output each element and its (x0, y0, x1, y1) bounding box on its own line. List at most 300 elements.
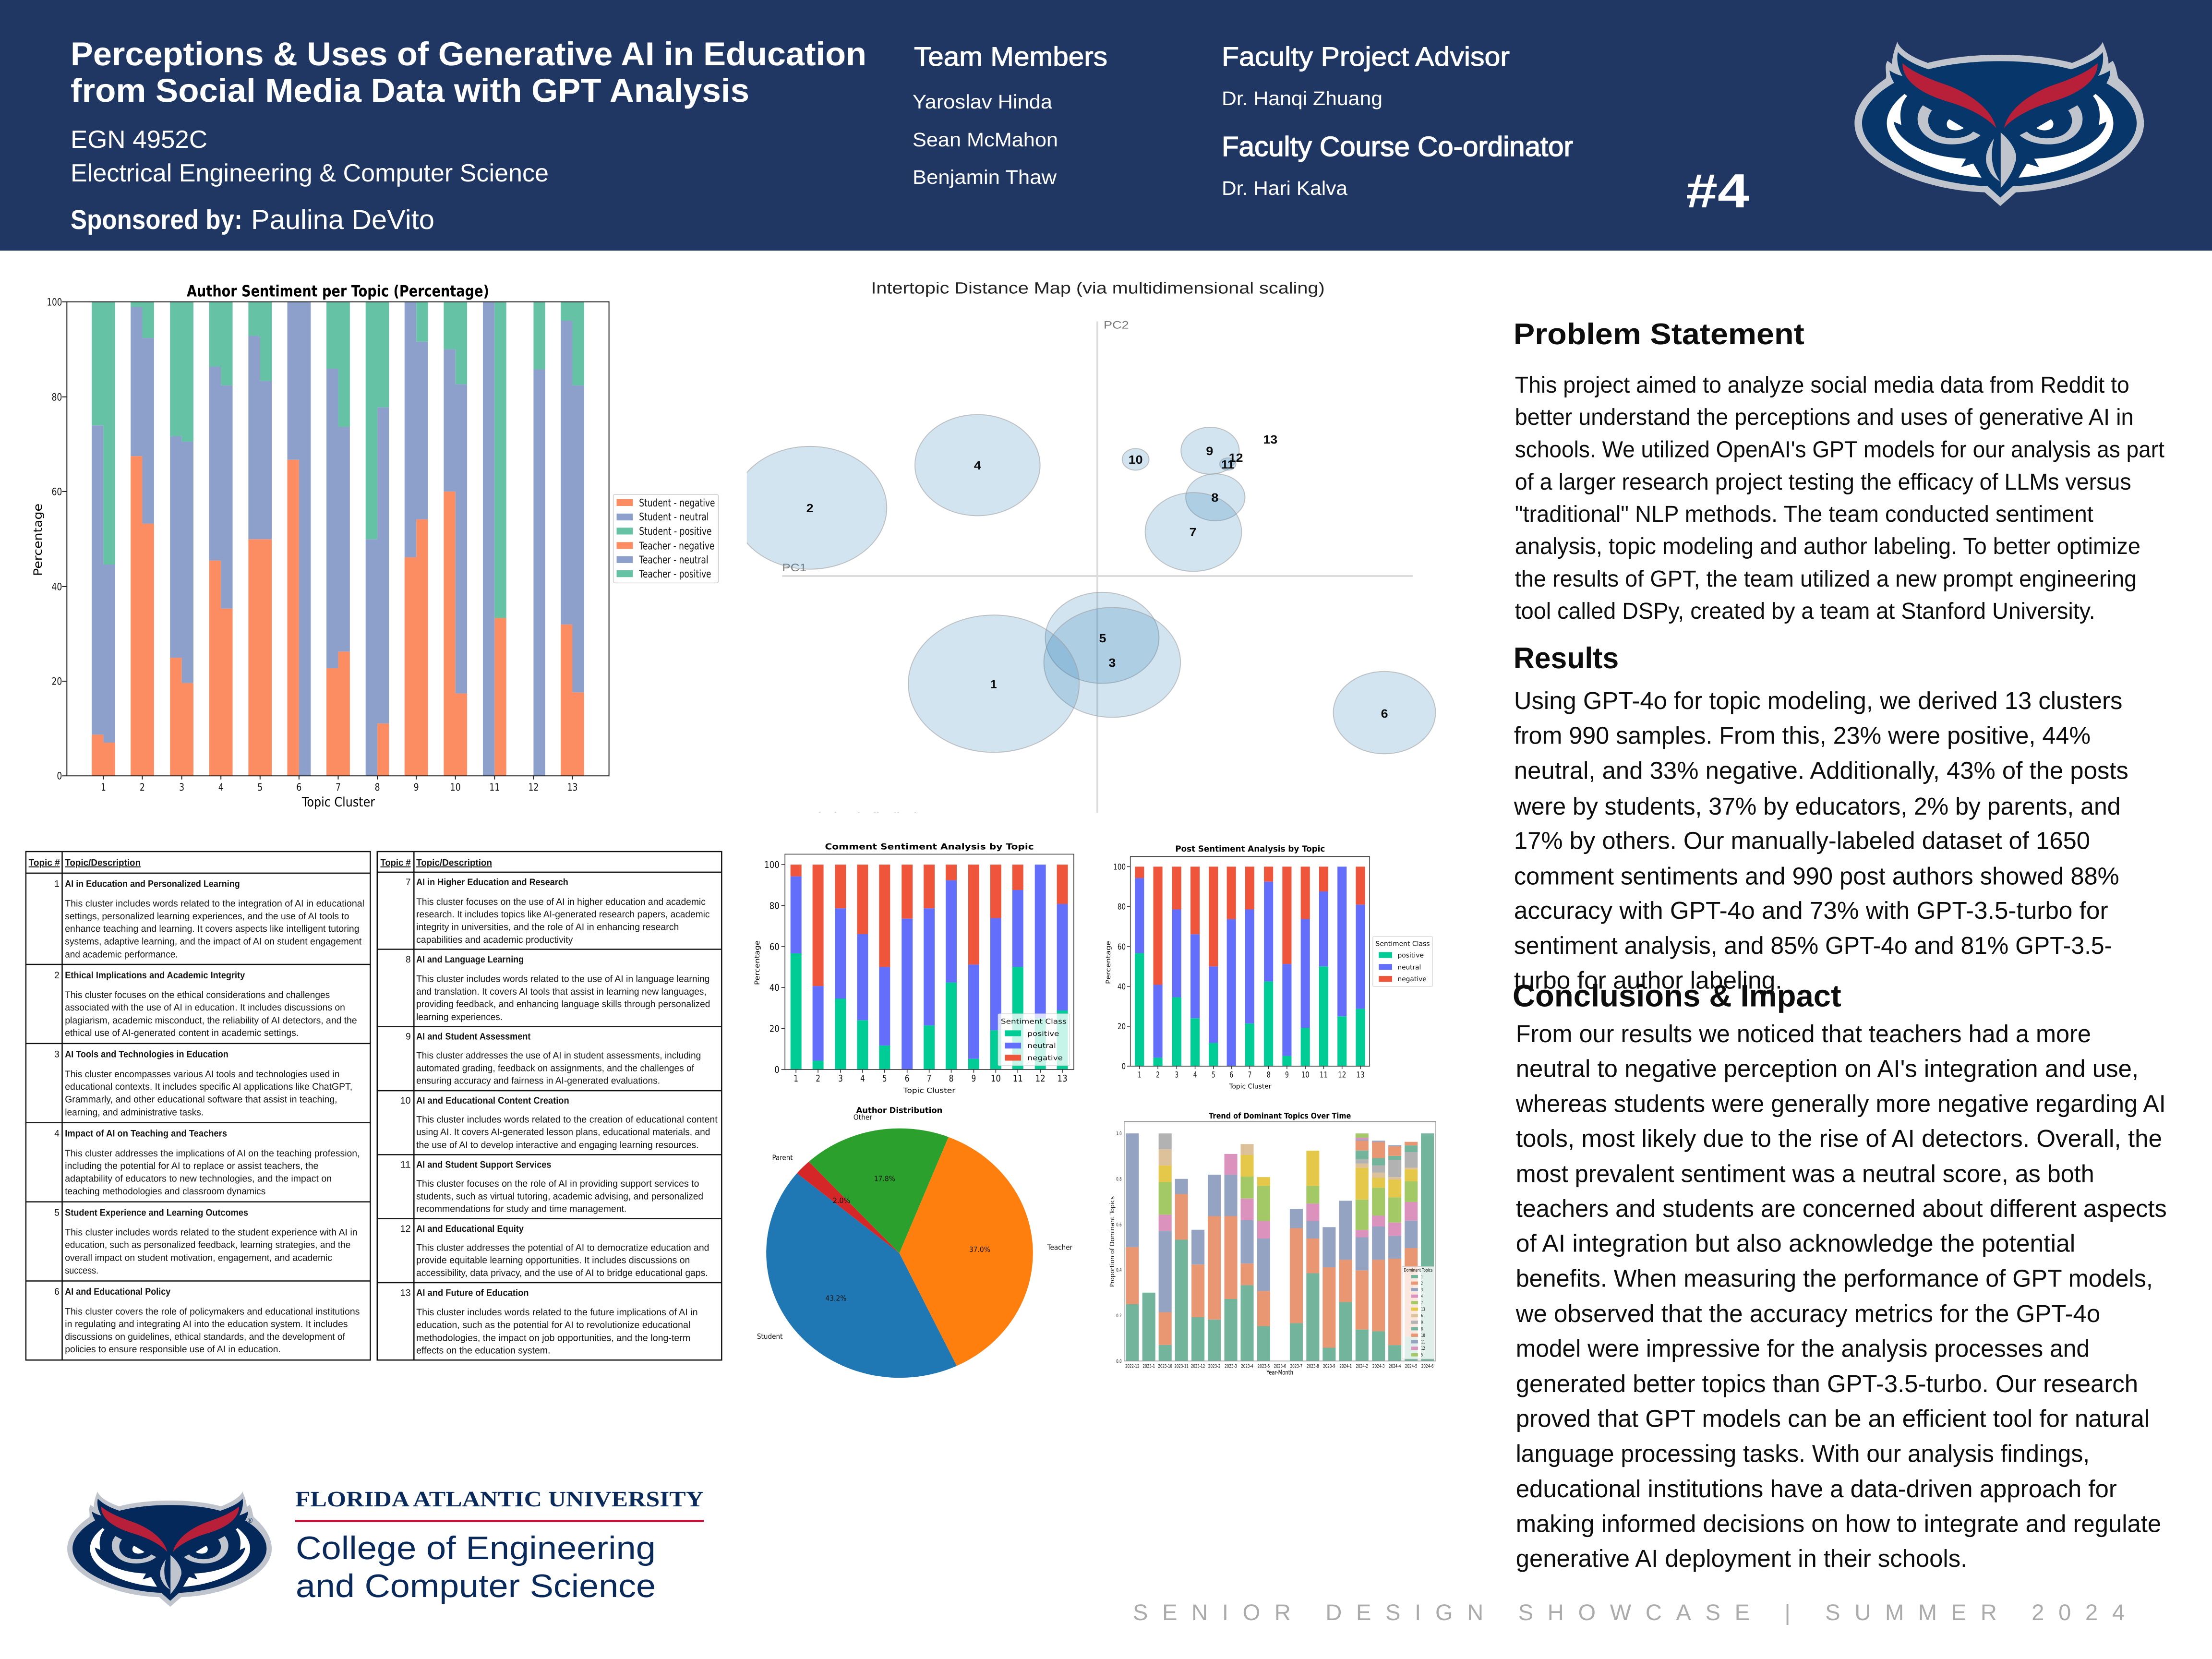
heading: problem statement: Problem Statement (1514, 317, 1804, 350)
text: results body: comment sentiments and 990 post authors showed 88% (1514, 863, 2119, 890)
university name: FLORIDA ATLANTIC UNIVERSITY (295, 1487, 704, 1511)
topic 3 (54, 1049, 352, 1118)
text: problem statement body: "traditional" NLP methods. The team conducted sentiment (1515, 501, 2093, 527)
bubble labels: 12 (1229, 451, 1243, 464)
topic 1: 1 (54, 878, 60, 889)
team members (913, 41, 1107, 188)
topic 12: provide equitable learning opportunities. It includes discussions on (416, 1255, 690, 1265)
faculty (1222, 41, 1573, 199)
legend: 4 (1421, 1294, 1423, 1299)
topic 2 (54, 970, 357, 1038)
axes and cut-off caption (782, 321, 1413, 822)
x axis tick labels: 3 (838, 1073, 843, 1084)
topic 5: education, such as personalized feedback, learning strategies, and the (65, 1239, 350, 1250)
text: conclusions body: generated better topics than GPT-3.5-turbo. Our research (1516, 1370, 2138, 1398)
topic 4: adaptability of educators to new technologies, and the impact on (65, 1173, 332, 1184)
x axis tick labels: 2023-6 (1274, 1363, 1286, 1369)
bubble labels: 11 (1221, 457, 1234, 471)
topic 6: policies to ensure responsible use of AI in education. (65, 1344, 281, 1354)
topic 10 (400, 1095, 718, 1150)
topic 13: methodologies, the impact on job opportunities, and the long-term (416, 1333, 690, 1343)
icon: owl logo (1854, 42, 2144, 206)
topic 9: This cluster addresses the use of AI in student assessments, including (416, 1050, 701, 1060)
x axis tick labels: 1 (1138, 1070, 1142, 1080)
legend: 9 (1421, 1320, 1423, 1325)
axes (781, 854, 1074, 1073)
legend: 11 (1421, 1339, 1425, 1345)
course information: EGN 4952C (71, 126, 207, 154)
topic 9 (406, 1031, 701, 1086)
topic 8: and translation. It covers AI tools that assist in learning new languages, (416, 986, 707, 997)
stacked bars: topics 4 and 12 (1159, 1138, 1418, 1238)
topic 3: AI Tools and Technologies in Education (65, 1049, 228, 1059)
topic 5: overall impact on student motivation, engagement, and academic (65, 1252, 332, 1263)
topic bubbles (733, 415, 1436, 754)
text: conclusions body (1515, 1020, 2167, 1573)
college name (296, 1530, 656, 1604)
team members: Benjamin Thaw (913, 166, 1057, 188)
bars: positive (92, 302, 584, 618)
topic 6: 6 (54, 1286, 60, 1297)
axes (62, 302, 609, 780)
chart: post sentiment analysis by topic: Topic Cluster (1229, 1082, 1271, 1090)
text: conclusions body: proved that GPT models can be an efficient tool for natural (1516, 1405, 2150, 1432)
axis labels: PC1 (782, 562, 806, 574)
topic 1: and academic performance. (65, 949, 178, 960)
chart: post sentiment analysis by topic: 20 (1118, 1022, 1126, 1031)
x axis tick labels: 7 (927, 1073, 931, 1084)
topic 4 (54, 1128, 360, 1196)
x axis tick labels: 1 (101, 781, 106, 793)
chart: comment sentiment analysis by topic: 0 (774, 1064, 780, 1075)
topic 3: educational contexts. It includes specific AI applications like ChatGPT, (65, 1081, 352, 1092)
x axis tick labels: 2024-6 (1421, 1363, 1434, 1369)
faculty: Faculty Course Co-ordinator (1222, 131, 1573, 162)
topic 5: 5 (54, 1207, 60, 1218)
topic 6: in regulating and integrating AI into the education system. It includes (65, 1319, 348, 1329)
title (71, 36, 866, 109)
topic 1: systems, adaptive learning, and the impact of AI on student engagement (65, 936, 361, 947)
bars: neutral (1135, 866, 1365, 1066)
topic 1: This cluster includes words related to the integration of AI in educational (65, 898, 364, 909)
topic 8: AI and Language Learning (416, 954, 524, 964)
text: conclusions body: we observed that the accuracy metrics for the GPT-4o (1515, 1300, 2100, 1328)
y axis tick labels: 20 (51, 675, 62, 687)
text: problem statement body (1515, 372, 2164, 624)
team members: Yaroslav Hinda (913, 91, 1052, 113)
slice labels: 2.0% (833, 1196, 850, 1204)
sponsor: Sponsored by: (71, 204, 242, 235)
topic 1 (54, 878, 364, 960)
x axis tick labels: 2023-4 (1241, 1363, 1253, 1369)
text: conclusions body: tools, most likely due to the rise of AI detectors. Overall, the (1516, 1125, 2162, 1153)
topic 8: providing feedback, and enhancing language skills through personalized (416, 999, 710, 1009)
x axis tick labels: 9 (972, 1073, 976, 1084)
chart: post sentiment analysis by topic: 40 (1118, 982, 1126, 991)
x axis tick labels: 2024-3 (1372, 1363, 1385, 1369)
bubble labels: 4 (974, 458, 981, 472)
topic 3: learning, and administrative tasks. (65, 1107, 204, 1118)
topic 8: learning experiences. (416, 1011, 503, 1022)
topic 7: AI in Higher Education and Research (416, 877, 568, 887)
text: conclusions body: of AI integration but also acknowledge the potential (1516, 1230, 2075, 1257)
x axis tick labels: 2023-9 (1323, 1363, 1335, 1369)
chart title: Author Sentiment per Topic (Percentage) (187, 282, 489, 301)
bars: positive (791, 953, 1068, 1070)
x axis tick labels: 3 (1175, 1070, 1178, 1080)
bars: neutral (92, 302, 584, 776)
x axis tick labels: 2 (140, 781, 145, 793)
x axis tick labels: 2023-7 (1290, 1363, 1302, 1369)
chart: post sentiment analysis by topic: 13 (1356, 1070, 1365, 1080)
topic 5: success. (65, 1265, 98, 1275)
project number: #4 (1686, 164, 1749, 218)
y axis title: percentage: Percentage (31, 504, 45, 576)
legend: Teacher - negative (639, 540, 715, 552)
topic 4: teaching methodologies and classroom dynamics (65, 1186, 265, 1196)
slice labels: Student (757, 1332, 782, 1340)
topic 8 (406, 954, 710, 1022)
y axis tick labels: 60 (51, 486, 62, 498)
y axis tick labels: 100 (47, 296, 62, 308)
topic 2: associated with the use of AI in education. It includes discussions on (65, 1002, 345, 1012)
bars: positive (1135, 953, 1365, 1066)
heading: results: Results (1514, 641, 1619, 674)
topic 4: Impact of AI on Teaching and Teachers (65, 1128, 227, 1139)
table header (29, 857, 141, 868)
chart: author sentiment per topic (47, 282, 718, 810)
table: topics 1 to 6 (26, 852, 370, 1360)
chart: post sentiment analysis by topic: 60 (1118, 942, 1126, 951)
x axis tick labels (101, 781, 577, 793)
chart title: Trend of Dominant Topics Over Time (1209, 1111, 1351, 1120)
topic 4: This cluster addresses the implications of AI on the teaching profession, (65, 1148, 360, 1158)
legend: positive (1027, 1030, 1059, 1037)
text: conclusions body: language processing tasks. With our analysis findings, (1516, 1440, 2090, 1467)
x axis tick labels: 2023-1 (1142, 1363, 1155, 1369)
chart: author distribution pie: Author Distribution (856, 1106, 942, 1115)
table header: Topic/Description (65, 857, 141, 868)
topic 3: This cluster encompasses various AI tools and technologies used in (65, 1069, 339, 1079)
x axis tick labels: 11 (489, 781, 500, 793)
chart: post sentiment analysis by topic: 80 (1118, 902, 1126, 912)
text: results body: accuracy with GPT-4o and 73% with GPT-3.5-turbo for (1514, 897, 2108, 924)
x axis tick labels: 4 (218, 781, 224, 793)
legend: Student - negative (639, 496, 715, 509)
sponsor: Paulina DeVito (251, 204, 434, 235)
panel: conclusions and impact (1513, 979, 2167, 1573)
topic 2: plagiarism, academic misconduct, the reliability of AI detectors, and the (65, 1015, 357, 1025)
topic 7: This cluster focuses on the use of AI in higher education and academic (416, 896, 706, 907)
stacked bars: topic 6 (1159, 1144, 1418, 1179)
text: conclusions body: teachers and students are concerned about different aspects (1516, 1195, 2167, 1223)
team members: Sean McMahon (913, 129, 1058, 151)
topic 3: Grammarly, and other educational software that assist in teaching, (65, 1094, 337, 1105)
bars: negative (92, 456, 584, 776)
y axis tick labels: 0.4 (1116, 1267, 1122, 1273)
topic 4: 4 (54, 1128, 60, 1139)
topic 10: the use of AI to develop interactive and engaging learning resources. (416, 1140, 698, 1150)
legend: 1 (1421, 1274, 1423, 1279)
stacked bars: topic 9 (1159, 1133, 1418, 1177)
x axis tick labels: 8 (949, 1073, 953, 1084)
x axis tick labels: 9 (1285, 1070, 1289, 1080)
legend (1373, 937, 1432, 986)
topic 4: including the potential for AI to replace or assist teachers, the (65, 1160, 318, 1171)
bubble labels (806, 433, 1388, 720)
chart: post sentiment analysis by topic: Post Sentiment Analysis by Topic (1175, 844, 1325, 854)
x axis tick labels: 2024-5 (1405, 1363, 1418, 1369)
x axis tick labels: 4 (860, 1073, 865, 1084)
topic 7: integrity in universities, and the role of AI in enhancing research (416, 922, 679, 932)
y axis tick labels: 40 (51, 581, 62, 593)
text: results body: Using GPT-4o for topic modeling, we derived 13 clusters (1514, 687, 2122, 714)
x axis title: Year-Month (1266, 1369, 1293, 1376)
y axis tick labels: 0 (57, 770, 62, 782)
x axis tick labels: 2023-3 (1225, 1363, 1237, 1369)
topic 13: 13 (400, 1287, 411, 1298)
text: results body: sentiment analysis, and 85% GPT-4o and 81% GPT-3.5- (1514, 932, 2112, 959)
slice: other (809, 1129, 949, 1253)
y axis tick labels (1116, 1130, 1122, 1364)
x axis tick labels: 6 (1229, 1070, 1233, 1080)
y axis tick labels (1113, 862, 1126, 1071)
registered mark: ® (248, 1516, 253, 1524)
bars: negative (791, 865, 1068, 986)
x axis tick labels: 2023-5 (1258, 1363, 1270, 1369)
table header: Topic/Description (416, 857, 492, 868)
x axis tick labels: 5 (257, 781, 263, 793)
topic 13 (400, 1287, 698, 1355)
chart: comment sentiment analysis by topic: 80 (769, 901, 780, 911)
topic 11 (400, 1159, 703, 1214)
legend: neutral (1397, 963, 1421, 971)
topic 5: Student Experience and Learning Outcomes (65, 1207, 248, 1218)
text: problem statement body: schools. We utilized OpenAI's GPT models for our analysis as part (1515, 436, 2164, 462)
topic 5 (54, 1207, 358, 1275)
chart: comment sentiment analysis by topic: 60 (769, 941, 780, 952)
topic 7: research. It includes topics like AI-generated research papers, academic (416, 909, 709, 919)
x axis tick labels: 2 (816, 1073, 820, 1084)
faculty: Dr. Hanqi Zhuang (1222, 87, 1382, 109)
topic 1: AI in Education and Personalized Learning (65, 878, 240, 889)
x axis tick labels (1125, 1363, 1434, 1369)
x axis tick labels: 12 (528, 781, 539, 793)
topic 11: recommendations for study and time management. (416, 1203, 626, 1214)
topic 11: This cluster focuses on the role of AI in providing support services to (416, 1178, 699, 1189)
x axis tick labels: 2023-2 (1208, 1363, 1220, 1369)
axis labels: PC2 (1104, 319, 1129, 331)
topic 3: 3 (54, 1049, 60, 1059)
x axis tick labels: 13 (567, 781, 577, 793)
x axis tick labels: 1 (793, 1073, 798, 1084)
x axis tick labels (793, 1073, 1068, 1084)
x axis tick labels: 6 (296, 781, 301, 793)
bubble labels: 8 (1211, 491, 1218, 504)
topic 11: AI and Student Support Services (416, 1159, 551, 1170)
chart: comment sentiment analysis by topic: 13 (1058, 1073, 1068, 1084)
title: Perceptions & Uses of Generative AI in Education (71, 36, 866, 72)
text: conclusions body: benefits. When measuring the performance of GPT models, (1516, 1265, 2153, 1292)
icon: owl logo (67, 1491, 272, 1607)
text: results body: turbo for author labeling. (1514, 967, 1782, 994)
text: results body (1514, 687, 2128, 994)
x axis tick labels: 3 (179, 781, 184, 793)
topic 6: discussions on guidelines, ethical standards, and the development of (65, 1332, 345, 1342)
chart: comment sentiment analysis by topic: Topic Cluster (903, 1086, 955, 1094)
topic 13: This cluster includes words related to the future implications of AI in (416, 1307, 698, 1317)
topic 7 (406, 877, 709, 945)
topic 7: capabilities and academic productivity (416, 935, 573, 945)
x axis tick labels: 10 (1301, 1070, 1310, 1080)
topic 11: 11 (400, 1159, 411, 1170)
text: problem statement body: of a larger research project testing the efficacy of LLMs versus (1515, 469, 2131, 495)
x axis tick labels: 10 (450, 781, 461, 793)
stacked bars: topics 1 and 8 (1126, 1133, 1434, 1361)
course information: Electrical Engineering & Computer Science (71, 159, 549, 187)
legend (1402, 1267, 1434, 1359)
icon: owl logo: ® (2111, 80, 2117, 87)
y axis title: proportion of dominant topics: Proportion of Dominant Topics (1108, 1196, 1116, 1287)
legend: positive (1397, 951, 1424, 959)
legend: Student - positive (639, 525, 712, 538)
topic 6: This cluster covers the role of policymakers and educational institutions (65, 1306, 360, 1317)
topic 12: This cluster addresses the potential of AI to democratize education and (416, 1242, 709, 1253)
legend: 10 (1421, 1333, 1425, 1338)
x axis tick labels: 11 (1320, 1070, 1328, 1080)
x axis tick labels: 4 (1193, 1070, 1197, 1080)
legend: 5 (1421, 1352, 1423, 1358)
text: conclusions body: model were impressive for the analysis processes and (1516, 1335, 2090, 1362)
slice labels: 37.0% (969, 1245, 990, 1254)
x axis tick labels: 5 (882, 1073, 887, 1084)
chart: comment sentiment analysis by topic: Sentiment Class (1001, 1018, 1067, 1025)
FAU college logo (67, 1487, 704, 1607)
topic 2: 2 (54, 970, 60, 980)
topic 13: effects on the education system. (416, 1345, 550, 1355)
table: topics 7 to 13 (377, 852, 721, 1360)
table header (380, 857, 492, 868)
text: results body: were by students, 37% by educators, 2% by parents, and (1514, 793, 2121, 820)
x axis tick labels: 11 (1013, 1073, 1023, 1084)
text: problem statement body: This project aimed to analyze social media data from Reddit to (1515, 372, 2129, 398)
text: results body: from 990 samples. From this, 23% were positive, 44% (1514, 722, 2091, 749)
slice: student (766, 1173, 957, 1378)
y axis tick labels: 0.0 (1116, 1358, 1122, 1364)
axes (1127, 856, 1370, 1069)
topic 8: 8 (406, 954, 411, 964)
x axis tick labels: 7 (336, 781, 341, 793)
stacked bars: topic 13 (1159, 1151, 1418, 1200)
bubble labels: 10 (1129, 453, 1143, 466)
table header: Topic # (29, 857, 60, 868)
x axis tick labels (1138, 1070, 1365, 1080)
chart: comment sentiment analysis by topic: 20 (769, 1023, 780, 1034)
legend: 2 (1421, 1281, 1423, 1286)
slice labels: Other (854, 1113, 872, 1121)
legend: 7 (1421, 1300, 1423, 1306)
topic 1: enhance teaching and learning. It covers aspects like intelligent tutoring (65, 923, 359, 934)
x axis tick labels: 2022-12 (1125, 1363, 1139, 1369)
topic 13: AI and Future of Education (416, 1287, 529, 1298)
slice labels (757, 1113, 1072, 1340)
bubble labels: 3 (1108, 656, 1116, 669)
table header: Topic # (380, 857, 411, 868)
topic 8: This cluster includes words related to the use of AI in language learning (416, 974, 709, 984)
slice: parent (797, 1162, 899, 1253)
topic 10: AI and Educational Content Creation (416, 1095, 569, 1106)
topic 10: This cluster includes words related to the creation of educational content (416, 1114, 718, 1125)
text: problem statement body: tool called DSPy, created by a team at Stanford University. (1515, 598, 2095, 624)
topic 6: AI and Educational Policy (65, 1286, 171, 1297)
y axis tick labels: 1.0 (1116, 1130, 1122, 1136)
y axis tick labels: 0.8 (1116, 1176, 1122, 1182)
slice labels: 17.8% (874, 1174, 895, 1183)
axes (1124, 1122, 1436, 1361)
x axis tick labels: 2024-2 (1356, 1363, 1368, 1369)
text: negative (1397, 975, 1427, 983)
x axis tick labels: 7 (1248, 1070, 1251, 1080)
text: problem statement body: the results of GPT, the team utilized a new prompt engineering (1515, 566, 2137, 592)
bubble labels: 9 (1206, 444, 1213, 457)
bars: neutral (791, 865, 1068, 1070)
footer: showcase banner: SENIOR DESIGN SHOWCASE | SUMMER 2024 (1133, 1599, 2125, 1625)
bubble labels: 1 (991, 677, 997, 691)
chart: author distribution pie (757, 1106, 1072, 1378)
text: conclusions body: neutral to negative perception on AI's integration and use, (1516, 1055, 2139, 1082)
topic 10: using AI. It covers AI-generated lesson plans, educational materials, and (416, 1127, 710, 1137)
chart: comment sentiment analysis by topic (764, 842, 1074, 1094)
legend: 8 (1421, 1326, 1423, 1332)
y axis tick labels (764, 859, 780, 1075)
text: conclusions body: generative AI deployment in their schools. (1516, 1545, 1967, 1573)
slice labels: Parent (772, 1154, 793, 1162)
x axis title: Topic Cluster (301, 795, 375, 810)
topic 9: 9 (406, 1031, 411, 1042)
legend (613, 494, 718, 583)
course information (71, 126, 549, 187)
topic 12: 12 (400, 1223, 411, 1234)
header band (0, 0, 2212, 251)
legend: Dominant Topics (1404, 1268, 1432, 1273)
topic 9: ensuring accuracy and fairness in AI-generated evaluations. (416, 1075, 660, 1086)
legend: 6 (1421, 1313, 1423, 1319)
topic 9: automated grading, feedback on assignments, and the challenges of (416, 1063, 694, 1073)
legend: Teacher - neutral (639, 553, 709, 566)
x axis tick labels: 2024-1 (1339, 1363, 1352, 1369)
x axis tick labels: 2024-4 (1389, 1363, 1401, 1369)
legend: negative (1027, 1054, 1063, 1062)
topic 12: AI and Educational Equity (416, 1223, 524, 1234)
faculty: Faculty Project Advisor (1222, 41, 1510, 72)
text: conclusions body: educational institutions have a data-driven approach for (1516, 1475, 2117, 1503)
legend: 12 (1421, 1346, 1425, 1351)
bubble labels: 6 (1381, 707, 1388, 720)
chart: trend of dominant topics over time (1116, 1111, 1436, 1376)
text: conclusions body: making informed decisions on how to integrate and regulate (1516, 1510, 2161, 1538)
chart: comment sentiment analysis by topic: Comment Sentiment Analysis by Topic (825, 842, 1034, 852)
topic 7: 7 (406, 877, 411, 887)
x axis tick labels: 9 (414, 781, 419, 793)
legend: Teacher - positive (639, 568, 711, 580)
slice: teacher (899, 1137, 1033, 1366)
topic 13: education, such as the potential for AI to revolutionize educational (416, 1320, 690, 1330)
slice labels: 43.2% (825, 1294, 846, 1302)
stacked bars: topics 2 and 10 (1126, 1141, 1418, 1347)
topic 12: accessibility, data privacy, and the use of AI to bridge educational gaps. (416, 1267, 708, 1278)
chart: comment sentiment analysis by topic: 40 (769, 982, 780, 993)
text: results body: 17% by others. Our manually-labeled dataset of 1650 (1514, 827, 2090, 854)
